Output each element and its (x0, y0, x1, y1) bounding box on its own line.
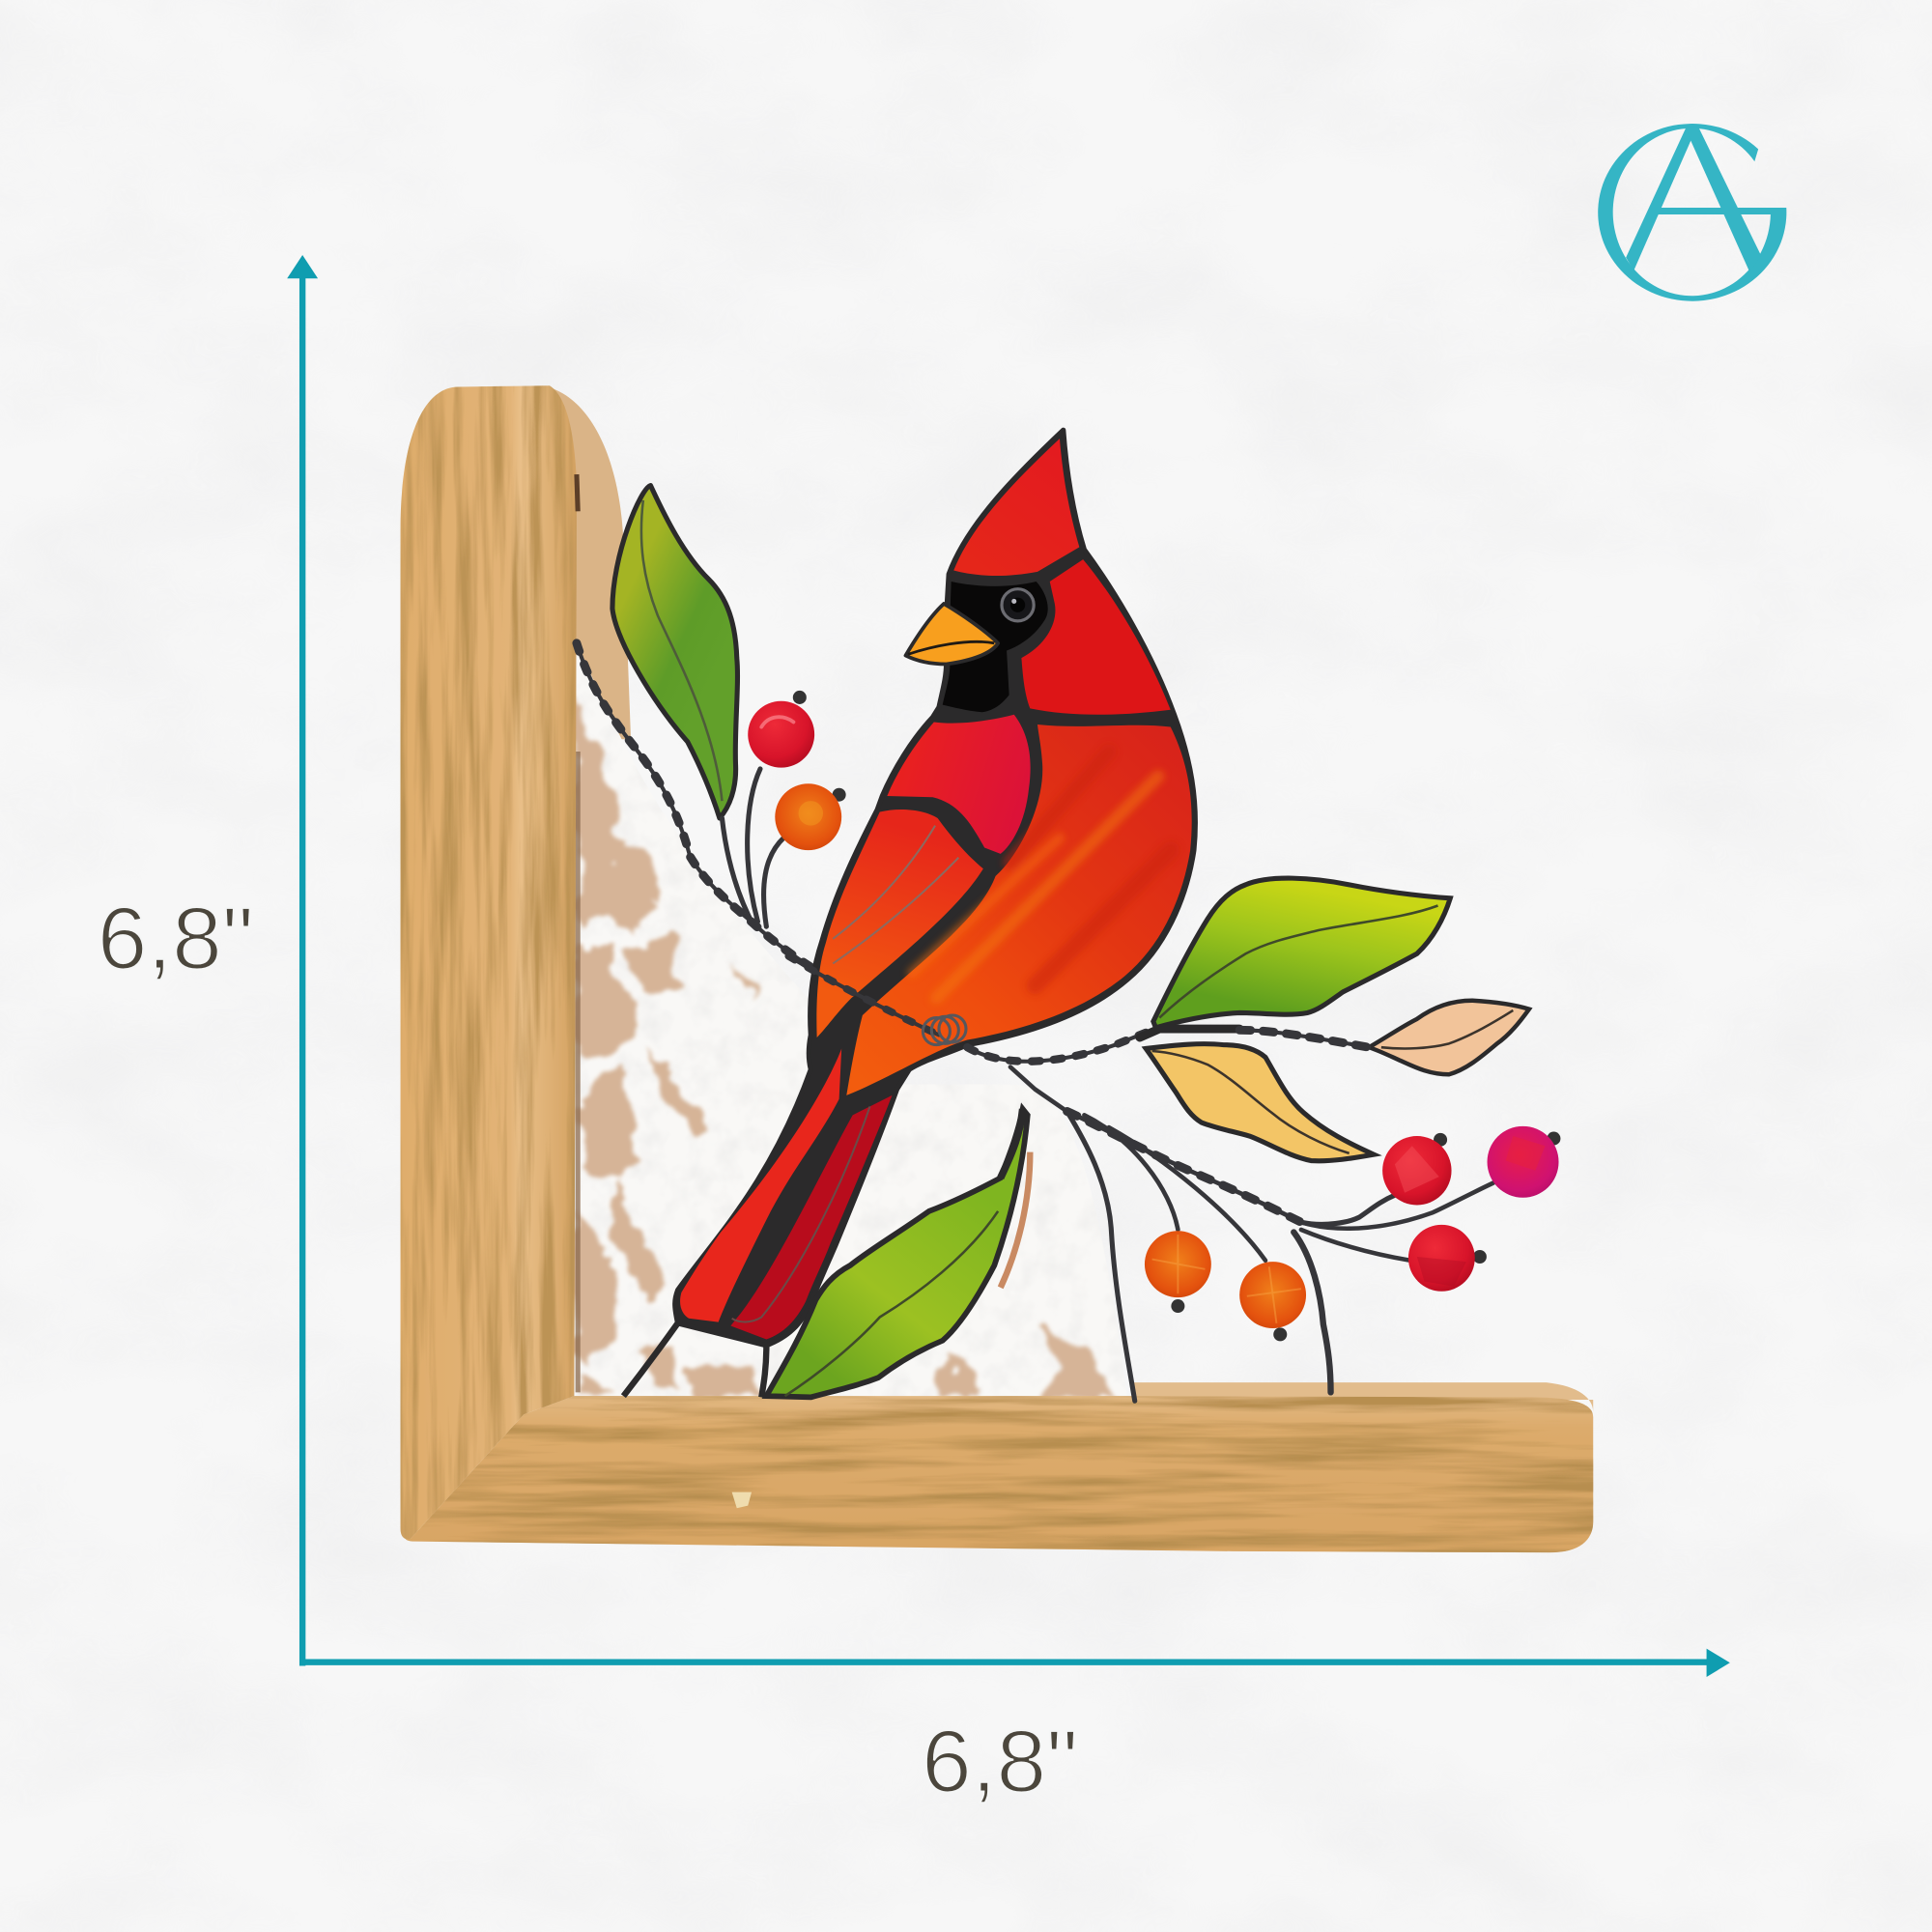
branch: wire to coil and coil (788, 956, 966, 1045)
berry: orange right (1239, 1262, 1306, 1341)
silhouette: lead underlay (675, 430, 1195, 1346)
branch: upper twisted wire (577, 643, 936, 1033)
wood: base top face (1133, 1382, 1593, 1412)
tail: dark feather (730, 1095, 892, 1339)
cheek (1021, 559, 1171, 715)
label: width 6,8 inches: 6,8" (922, 1714, 1078, 1811)
mask: black face (943, 582, 1048, 712)
berry: upper orange (775, 783, 846, 850)
stems: to right berries (1301, 1195, 1395, 1224)
leaf: lower green (766, 1109, 1028, 1397)
tail: stems to glass base (623, 1323, 766, 1397)
belly (846, 724, 1192, 1095)
wood: blemish (732, 1492, 752, 1508)
leaf: yellow (1146, 1044, 1374, 1161)
twig: stem to ground (1067, 1112, 1135, 1401)
berry: red lower (1408, 1225, 1487, 1292)
shoulder (887, 715, 1031, 854)
berry: orange left (1145, 1231, 1211, 1313)
belly: glass streaks (912, 752, 1171, 998)
eye (1002, 589, 1034, 621)
leaf: peach (1369, 1001, 1529, 1074)
wood frame (401, 385, 1593, 1552)
glass: copper foil edge (1001, 1152, 1030, 1288)
stem: to orange berries (1084, 1115, 1178, 1230)
glass panel (576, 640, 1127, 1400)
arrow: height dimension (287, 255, 318, 1665)
label: height 6,8 inches: 6,8" (98, 891, 254, 988)
tail: bright feather (680, 1048, 841, 1322)
berry: red top (1382, 1133, 1452, 1205)
crest (953, 439, 1079, 576)
stems and berries: upper pair (722, 691, 846, 926)
berry: upper red (748, 691, 814, 768)
twig: lower right to ground (1293, 1233, 1331, 1392)
leaf: right green (1153, 878, 1450, 1028)
wood: post (401, 385, 577, 1539)
wing (816, 810, 983, 1037)
branch: main twisted wire right (967, 1033, 1493, 1401)
leaf: left green (612, 486, 737, 818)
wood: back arch of post (542, 385, 631, 739)
logo: AG monogram (1598, 124, 1786, 301)
wood: base with rounded end (404, 1396, 1593, 1552)
beak (906, 604, 998, 665)
branch: peach leaf stem and node (1140, 1029, 1369, 1047)
berry: magenta (1488, 1126, 1560, 1198)
arrow: width dimension (301, 1649, 1730, 1677)
cardinal (623, 430, 1195, 1397)
glass: dark edge (576, 752, 580, 1392)
glass: amber reflections (576, 690, 1115, 1397)
wood: slot (577, 474, 578, 511)
